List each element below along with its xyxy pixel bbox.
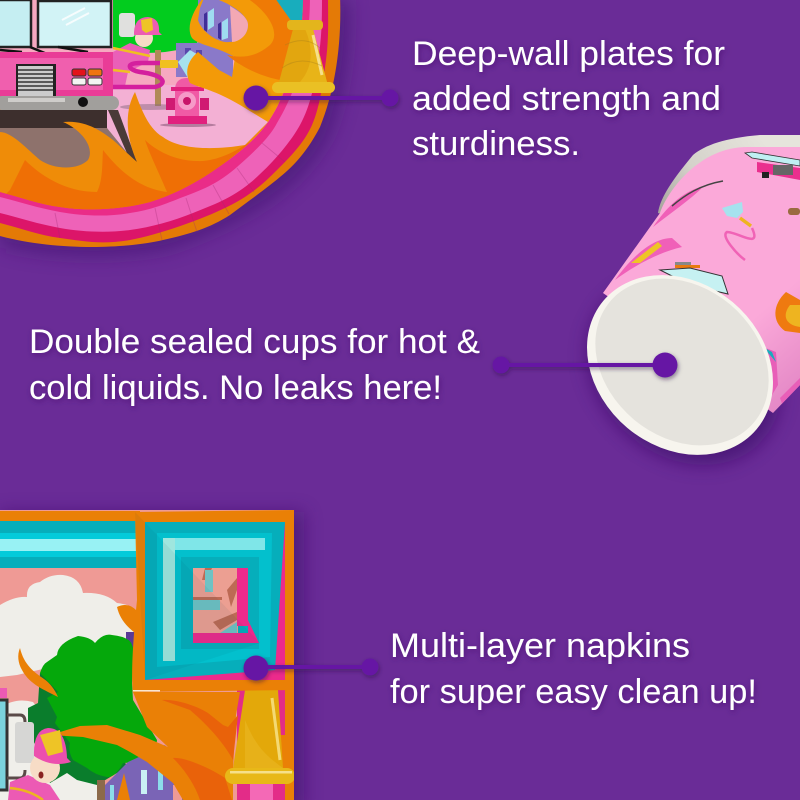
text: plates: added strength and xyxy=(412,80,721,118)
lower flames dark xyxy=(0,140,250,215)
flame wisp left xyxy=(18,648,58,697)
fire truck xyxy=(0,0,119,131)
cone xyxy=(225,690,295,784)
firefighter xyxy=(8,728,71,800)
helmet motif upper xyxy=(653,186,704,227)
text: plates: Deep-wall plates for xyxy=(412,35,725,73)
road xyxy=(0,128,127,168)
ground xyxy=(107,85,284,160)
purple building behind flap xyxy=(126,632,134,648)
flame wisp top xyxy=(117,605,136,632)
cloud lower xyxy=(60,773,97,800)
sky xyxy=(0,0,305,100)
right stripes xyxy=(237,690,294,800)
napkin flames xyxy=(50,692,240,800)
callout marker: plates xyxy=(244,86,398,110)
cup rim xyxy=(658,135,800,214)
callout marker: napkins xyxy=(244,656,378,680)
cup shadow xyxy=(550,241,800,503)
top stripes xyxy=(0,511,140,568)
cup body xyxy=(603,147,800,413)
cup xyxy=(582,135,800,470)
plate illustration xyxy=(0,0,303,210)
hose motif xyxy=(725,228,754,260)
hose xyxy=(113,63,163,87)
water spray xyxy=(178,50,196,78)
napkin xyxy=(0,510,304,800)
napkin artwork xyxy=(0,510,295,800)
water motif xyxy=(722,202,743,218)
hydrant xyxy=(160,78,216,127)
text: cups: Double sealed cups for hot & xyxy=(29,323,480,361)
folded flap xyxy=(132,510,294,692)
cup base xyxy=(551,238,800,492)
brown motif xyxy=(788,208,800,215)
small truck motif xyxy=(745,152,800,180)
text: plates: sturdiness. xyxy=(412,125,580,163)
firefighter xyxy=(113,13,162,86)
flame opening showing building xyxy=(198,0,248,42)
flap fold shading xyxy=(135,512,260,680)
text: napkins: Multi-layer napkins xyxy=(390,627,690,665)
text: napkins: for super easy clean up! xyxy=(390,673,757,711)
flap centre square xyxy=(193,568,259,643)
text: napkins xyxy=(390,627,757,711)
lower flames light xyxy=(0,92,268,210)
flame motif xyxy=(775,292,800,333)
text: cups: cold liquids. No leaks here! xyxy=(29,369,442,407)
cloud xyxy=(0,575,140,677)
tree xyxy=(113,0,201,110)
upper swirl flame xyxy=(187,0,310,122)
windshield motif xyxy=(660,262,728,294)
plate xyxy=(0,0,350,257)
green tree xyxy=(40,635,157,777)
building xyxy=(97,745,200,800)
text: plates xyxy=(412,35,725,163)
callout marker: cups xyxy=(492,352,678,378)
text: cups xyxy=(29,323,480,407)
napkin shadow xyxy=(0,512,304,800)
napkin base xyxy=(0,510,294,800)
nozzle motif xyxy=(740,218,751,226)
nozzle xyxy=(160,60,178,68)
dark tree xyxy=(28,673,127,785)
plate shadow xyxy=(0,0,350,257)
traffic cone xyxy=(272,20,335,93)
building xyxy=(176,0,233,77)
truck door xyxy=(0,688,34,790)
side motifs xyxy=(766,348,778,395)
cloud behind truck xyxy=(0,700,60,800)
helmet motif lower xyxy=(615,238,682,280)
teal pattern at rim xyxy=(276,0,303,20)
plate rim xyxy=(0,0,340,247)
